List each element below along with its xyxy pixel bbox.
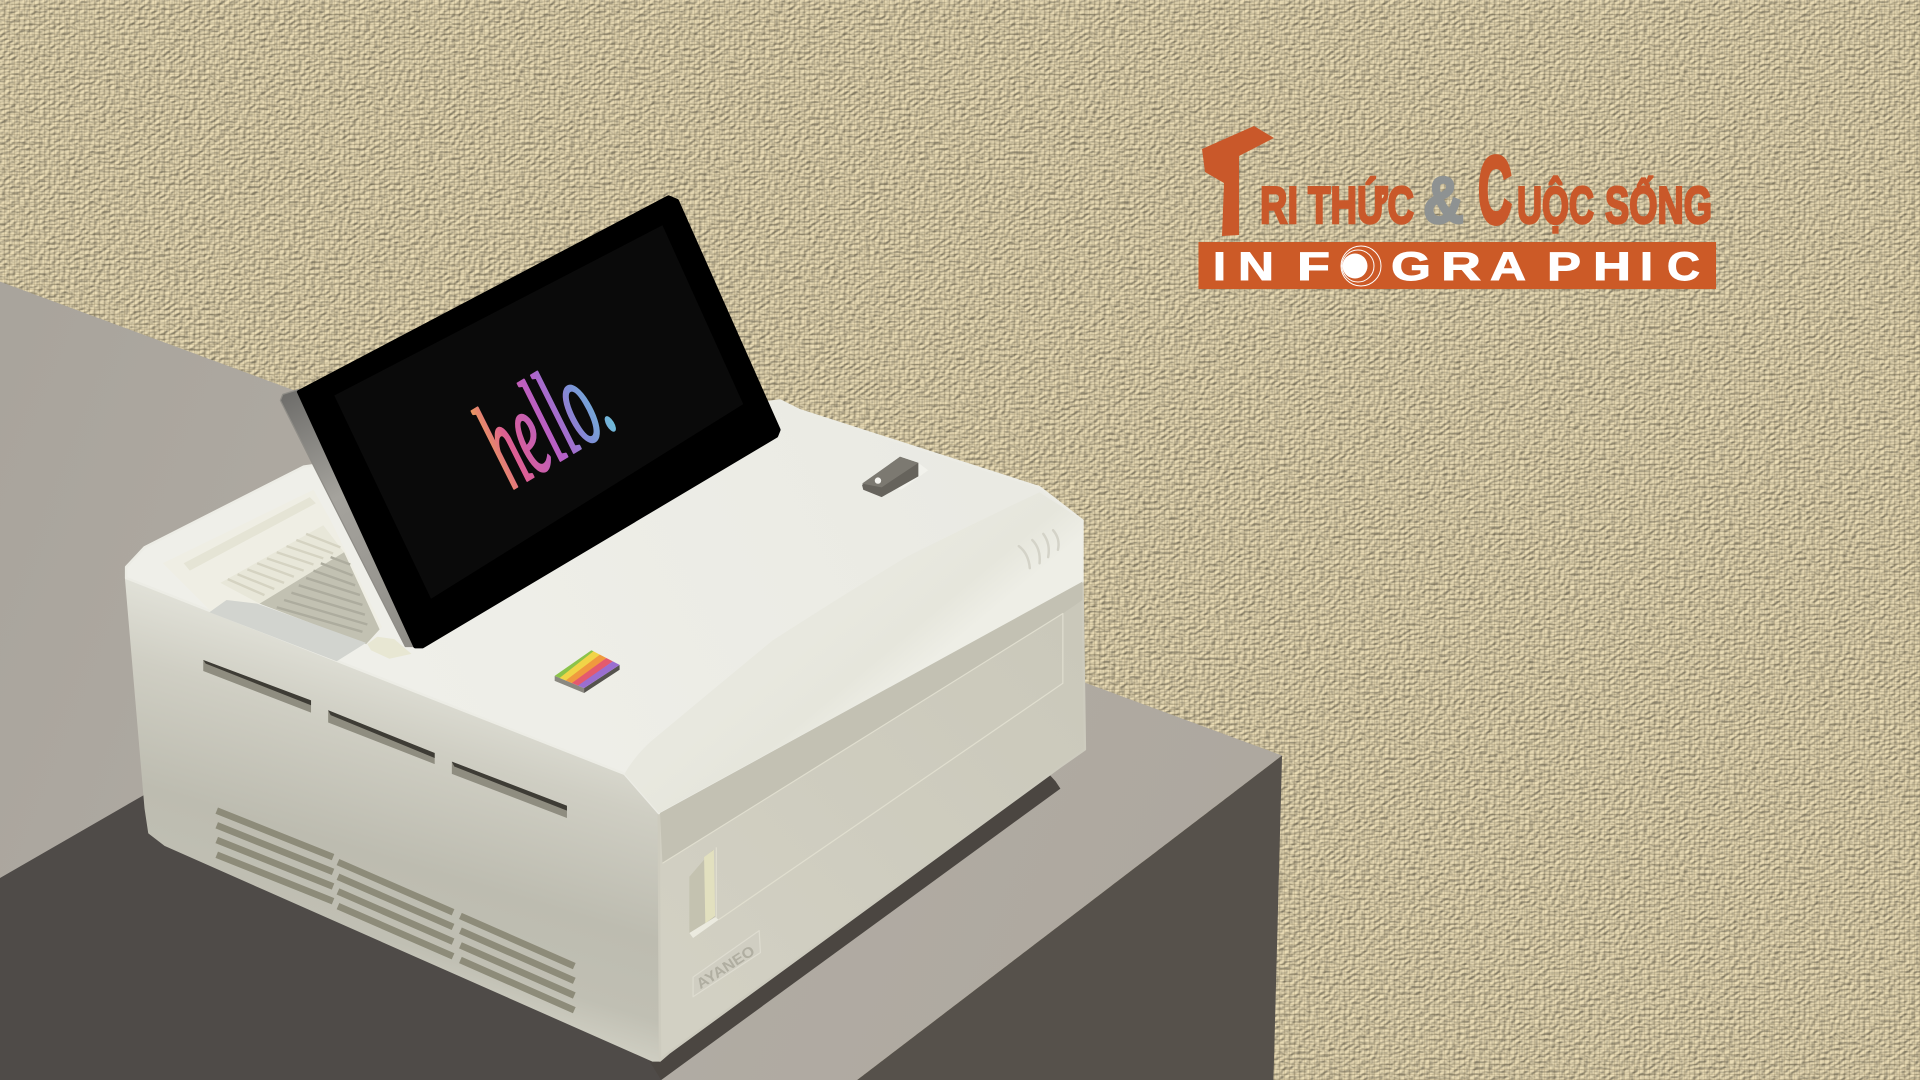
front slots (203, 660, 567, 818)
banner text: F (1297, 245, 1330, 289)
front ledge (209, 600, 366, 661)
table shadow zone (0, 795, 669, 1080)
recess floor (163, 490, 382, 644)
banner text: G (1391, 245, 1431, 289)
table (0, 282, 1282, 1080)
infographic banner (1198, 242, 1716, 289)
banner text: P (1547, 245, 1581, 289)
door handle recess (689, 850, 719, 938)
brand plate (693, 931, 760, 997)
printer cast shadow (649, 765, 1060, 1080)
hello text: hello. (455, 329, 635, 514)
banner text: I (1640, 245, 1653, 289)
banner text: N (1238, 245, 1274, 289)
logo T mark (1202, 126, 1274, 236)
banner text: C (1667, 245, 1700, 289)
scene: table and printer (0, 195, 1282, 1080)
banner text: A (1490, 245, 1526, 289)
logo wordmark: THỨC (1308, 177, 1414, 235)
logo wordmark: RI (1260, 177, 1298, 235)
left face (126, 578, 660, 1060)
front slope (624, 492, 1082, 813)
logo wordmark: UỘC (1517, 176, 1594, 235)
top face (126, 400, 1082, 813)
tablet screen (334, 225, 743, 599)
logo wordmark (1260, 137, 1712, 244)
logo wordmark: SỐNG (1605, 176, 1712, 235)
hinge (367, 637, 411, 659)
recess groove (184, 497, 316, 571)
power switch (862, 457, 928, 497)
tablet (280, 197, 779, 647)
rear vent recess (163, 490, 411, 661)
tablet bezel (299, 197, 779, 647)
tablet silver edge (280, 389, 419, 647)
door outline (662, 613, 1063, 920)
rainbow badge (554, 650, 620, 693)
right face upper band (660, 582, 1082, 863)
banner text: H (1593, 245, 1631, 289)
banner text: I (1213, 245, 1226, 289)
banner O emblem (1341, 246, 1381, 286)
table dark side (857, 756, 1282, 1080)
table light surface (0, 282, 1282, 1080)
logo wordmark: & (1423, 163, 1464, 237)
banner text (1213, 245, 1700, 289)
lit slats (220, 525, 344, 604)
logo wordmark: C (1478, 137, 1512, 244)
right face (659, 582, 1085, 1060)
bottom vent slats (217, 811, 574, 1010)
shaded slats (260, 552, 380, 644)
brand name: AYANEO (694, 943, 758, 993)
indicator ridges (1019, 530, 1059, 568)
printer body (126, 400, 1085, 1060)
banner text: R (1441, 245, 1481, 289)
